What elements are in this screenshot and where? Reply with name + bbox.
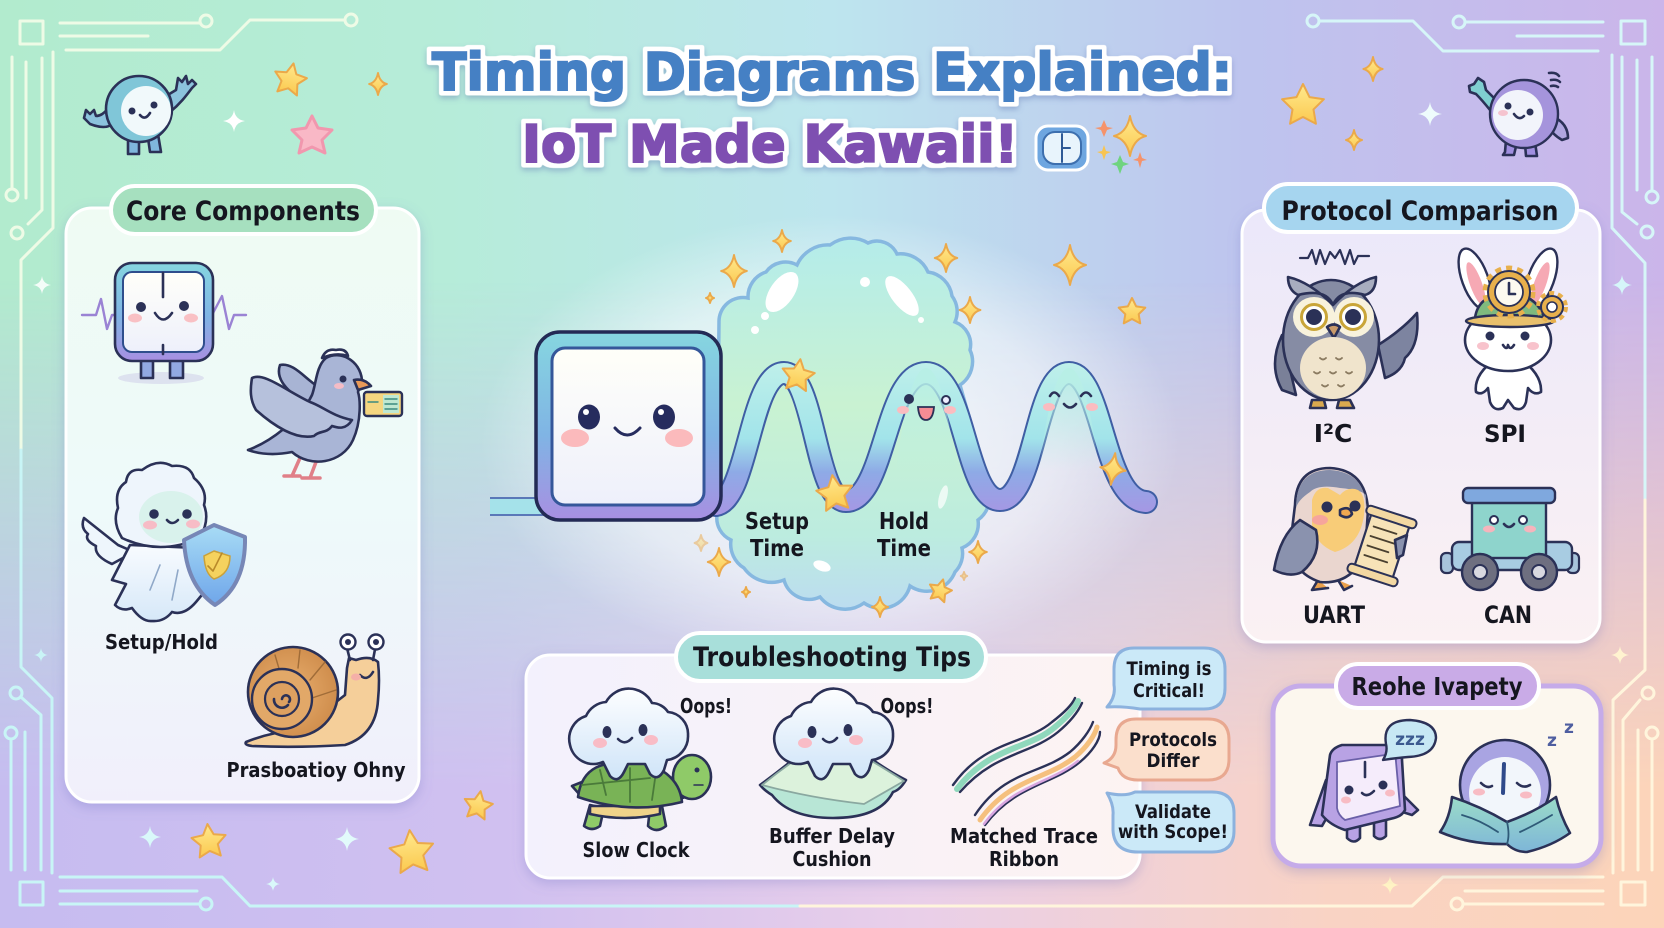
glow behind bubble: [480, 215, 1180, 665]
callout: timing is critical: [1107, 648, 1225, 709]
panel: sleep modes: [1273, 664, 1601, 866]
label: uart: UART: [1303, 601, 1366, 629]
icon: setup hold guardian angel: [83, 463, 245, 621]
callout: chip zzz: zzz: [1395, 730, 1425, 750]
timing waveform ribbon: [716, 373, 1146, 505]
callout: validate with scope: Validate: [1135, 801, 1211, 823]
circuit traces: top right: [1307, 15, 1658, 500]
panel card: [66, 208, 419, 802]
icon: can bus cart: [1441, 488, 1579, 590]
jelly bubble: [717, 238, 990, 609]
label: can: CAN: [1484, 601, 1532, 629]
circuit traces: top left: [6, 14, 357, 450]
callout: protocols differ: Protocols: [1129, 729, 1217, 751]
icon: matched trace ribbon: [953, 698, 1100, 825]
callout: validate with scope: with Scope!: [1118, 821, 1228, 843]
icon: title clock and sparkles: [1036, 116, 1147, 174]
mascot: waving clock top left: [84, 76, 196, 154]
callout: protocols differ: [1104, 719, 1229, 780]
circuit traces: bottom left: [5, 450, 800, 910]
icon: uart bird with scroll: [1274, 468, 1418, 590]
icon: sleeping chip: [1310, 745, 1418, 842]
label: setup time: Time: [750, 536, 804, 562]
panel card: [526, 655, 1140, 878]
heading pill: troubleshooting tips: Troubleshooting Tips: [693, 642, 971, 673]
label: matched trace ribbon: Ribbon: [989, 847, 1059, 871]
icon: clock chip with pulse: [82, 263, 246, 384]
icon: bunny with gear hat: [1452, 244, 1566, 409]
title: [432, 43, 1232, 175]
heading pill: protocol comparison: [1264, 184, 1577, 232]
label: matched trace ribbon: Matched Trace: [950, 824, 1098, 848]
heading pill: protocol comparison: Protocol Comparison: [1282, 196, 1558, 227]
label: buffer delay cushion: Cushion: [792, 847, 872, 871]
heading pill: core components: Core Components: [126, 196, 360, 227]
wave hills: [896, 368, 1099, 470]
callout: timing is critical: Timing is: [1126, 658, 1212, 680]
label: oops turtle: Oops!: [680, 694, 732, 718]
title: Timing Diagrams Explained:: [432, 43, 1232, 103]
title: IoT Made Kawaii!: [522, 115, 1018, 175]
label: i2c: I²C: [1314, 419, 1352, 448]
label: hold time: Hold: [879, 509, 929, 535]
icon: snail: [246, 634, 384, 747]
label: garbled snail caption: Prasboatioy Ohny: [226, 758, 406, 782]
heading pill: troubleshooting tips: [676, 633, 986, 681]
heading pill: garbled title: [1336, 664, 1539, 708]
label: setup time: Setup: [745, 509, 809, 535]
callout: protocols differ: Differ: [1146, 750, 1200, 772]
wave face: winking: [897, 394, 956, 420]
label: oops cushion: Oops!: [880, 694, 934, 718]
chip character: [536, 332, 721, 520]
central timing diagram: [480, 215, 1180, 665]
icon: owl: [1275, 250, 1418, 408]
label: sleeping z letters: z: [1547, 731, 1557, 751]
sparkles around bubble: [695, 230, 1145, 617]
label: hold time: Time: [877, 536, 931, 562]
bubble highlights: [751, 266, 950, 574]
callout: timing is critical: Critical!: [1133, 680, 1205, 702]
icon: carrier pigeon with parcel: [248, 350, 402, 478]
label: spi: SPI: [1484, 420, 1526, 448]
input lead: [490, 498, 550, 515]
panel: troubleshooting tips: [526, 633, 1140, 878]
heading pill: garbled title: Reohe Ivapety: [1352, 672, 1522, 701]
mascot: waving clock top right: [1469, 73, 1568, 156]
heading pill: core components: [111, 186, 376, 234]
panel: protocol comparison: [1242, 184, 1600, 642]
wave face: smiling: [1043, 392, 1098, 411]
circuit traces: bottom right: [800, 500, 1658, 910]
label: sleeping z letters: z: [1564, 718, 1574, 738]
label: slow clock: Slow Clock: [582, 838, 690, 862]
icon: turtle with cloud: [569, 689, 711, 830]
icon: sleeping clock in blanket: [1440, 740, 1570, 852]
panel: core components: [66, 186, 419, 802]
panel card: [1273, 686, 1601, 866]
label: buffer delay cushion: Buffer Delay: [769, 824, 895, 848]
panel card: [1242, 210, 1600, 642]
icon: cloud on buffer cushion: [760, 689, 906, 818]
callout: validate with scope: [1107, 792, 1234, 852]
callout: chip zzz: [1383, 720, 1436, 760]
label: setup hold: Setup/Hold: [105, 630, 218, 654]
